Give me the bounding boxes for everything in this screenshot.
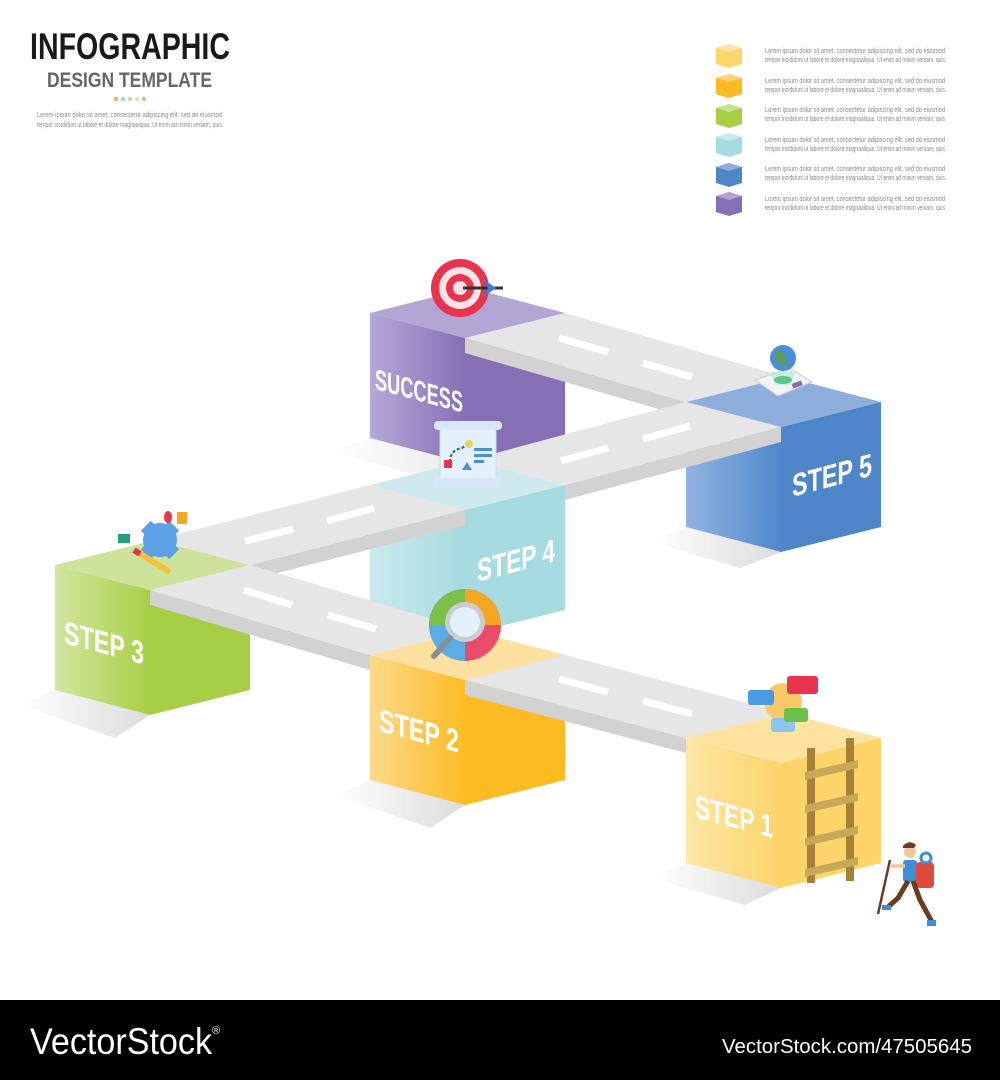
road: step 4 to step 5 (470, 402, 781, 500)
legend: Lorem ipsum dolor sit amet, consectetur adipiscing elit, sed do eiusmod (765, 78, 945, 85)
icon: colour wheel magnifier (429, 589, 501, 661)
hiker (878, 842, 936, 926)
icon: globe hologram (755, 345, 812, 396)
intro text: Lorem ipsum dolor sit amet, consectetur adipiscing elit, sed do eiusmod (37, 112, 222, 119)
icon: lightbulb with chat (748, 676, 818, 732)
legend: Lorem ipsum dolor sit amet, consectetur adipiscing elit, sed do eiusmod (765, 196, 945, 203)
icon: scroll plan (434, 421, 502, 487)
title: INFOGRAPHIC (30, 26, 230, 67)
legend: Lorem ipsum dolor sit amet, consectetur adipiscing elit, sed do eiusmod (765, 107, 945, 114)
icon: gear and pencil (118, 511, 187, 572)
cube: step 4: STEP 4 (477, 533, 555, 589)
footer bar: VectorStock.com/47505645 (722, 1036, 972, 1058)
intro text (37, 112, 222, 129)
cube: success (370, 288, 565, 463)
footer bar: VectorStock (30, 1021, 212, 1062)
legend (716, 44, 945, 216)
footer bar (0, 1000, 1000, 1080)
ladder (805, 738, 858, 883)
cube: step 3 (55, 540, 250, 715)
cube: step 5 (686, 377, 881, 552)
cube: step 1 (686, 713, 881, 888)
shadows (20, 438, 781, 905)
legend: Lorem ipsum dolor sit amet, consectetur adipiscing elit, sed do eiusmod (765, 137, 945, 144)
cube: step 5: STEP 5 (792, 447, 872, 504)
cube: step 3: STEP 3 (64, 615, 144, 671)
legend: Lorem ipsum dolor sit amet, consectetur adipiscing elit, sed do eiusmod (765, 166, 945, 173)
road: step 2 to step 1 (465, 655, 786, 753)
cube: success: SUCCESS (375, 363, 463, 419)
road: success to step 5 (465, 313, 786, 417)
legend: Lorem ipsum dolor sit amet, consectetur adipiscing elit, sed do eiusmod (765, 48, 945, 55)
cube: step 1: STEP 1 (695, 789, 773, 845)
cube: step 2 (370, 630, 565, 805)
footer bar: ® (212, 1025, 220, 1037)
icon: target (431, 259, 503, 317)
title: DESIGN TEMPLATE (47, 69, 212, 92)
colour dots (114, 97, 146, 101)
cube: step 2: STEP 2 (379, 703, 459, 759)
road: step 3 to step 4 (155, 485, 465, 580)
intro text: tempor incididunt ut labore et dolore magnaaliqua. Ut enim ad minim veniam, quis (37, 122, 222, 129)
cube: step 4 (370, 460, 565, 635)
road: step 3 to step 2 (150, 565, 470, 670)
title (30, 26, 230, 92)
